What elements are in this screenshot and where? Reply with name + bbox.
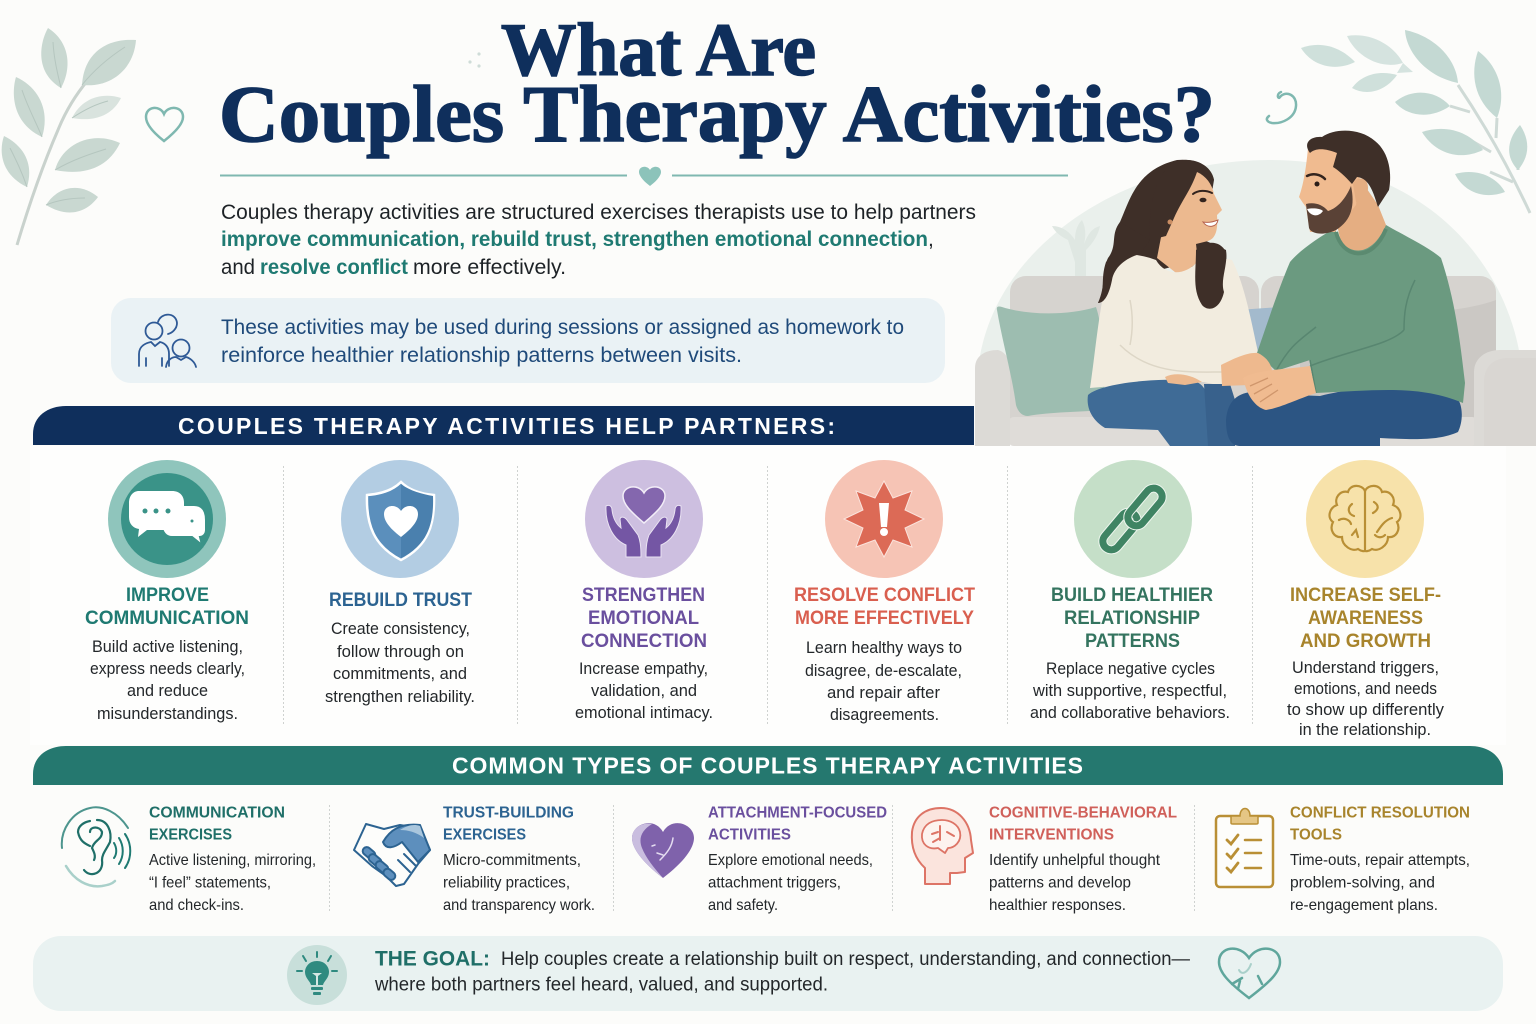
description: with supportive, respectful, [1032, 682, 1227, 700]
heading: RESOLVE CONFLICT [794, 585, 975, 606]
spiral decoration [1267, 92, 1296, 123]
heading: REBUILD TRUST [329, 590, 472, 611]
description: to show up differently [1287, 701, 1445, 719]
activity: cognitive-behavioral interventions [912, 804, 1177, 914]
blue pillow [1210, 307, 1280, 365]
heading [1290, 585, 1441, 652]
heading: COGNITIVE-BEHAVIORAL [989, 804, 1177, 822]
heading [989, 804, 1177, 844]
benefit: resolve conflict [794, 460, 975, 724]
heading: ACTIVITIES [708, 826, 791, 844]
description: re-engagement plans. [1290, 897, 1438, 914]
activity dividers [330, 805, 1194, 912]
description: Replace negative cycles [1046, 660, 1215, 678]
illustration: couple on sofa [975, 131, 1536, 446]
goal bar [33, 936, 1503, 1011]
activity: communication exercises [62, 804, 316, 914]
title [219, 9, 1215, 159]
description: Increase empathy, [579, 660, 708, 678]
description: and reduce [127, 682, 208, 700]
description: and safety. [708, 897, 778, 914]
woman hand on knee [1165, 374, 1202, 385]
heading: EMOTIONAL [588, 608, 699, 629]
icon: starburst alert [825, 460, 943, 578]
description: Understand triggers, [1292, 659, 1439, 677]
left leaf branch decoration [2, 28, 136, 245]
icon: ear [62, 807, 130, 886]
goal text: THE GOAL: [375, 948, 490, 970]
arch backdrop [978, 160, 1522, 400]
description: healthier responses. [989, 897, 1126, 914]
description: emotional intimacy. [575, 704, 713, 722]
icon: clipboard checklist [1216, 808, 1273, 887]
icon: chat bubbles [108, 460, 226, 578]
right leaf branch decoration [1301, 30, 1530, 213]
green pillow [997, 306, 1104, 416]
man face [1299, 148, 1360, 232]
goal text: where both partners feel heard, valued, and supported. [374, 974, 828, 996]
intro paragraph: more effectively. [413, 256, 566, 279]
icon: head with brain [912, 808, 973, 884]
description [989, 852, 1161, 914]
activity: conflict resolution tools [1216, 804, 1470, 914]
intro paragraph [221, 201, 976, 279]
icon: purple heart [632, 823, 694, 878]
heading: EXERCISES [149, 826, 232, 844]
benefit: improve communication [85, 460, 249, 723]
woman hair back [1098, 160, 1226, 308]
icon: couple [139, 315, 196, 367]
description: and transparency work. [443, 897, 595, 914]
callout: homework note: reinforce healthier relationship patterns between visits. [221, 344, 742, 367]
benefit: strengthen emotional connection [575, 460, 713, 722]
heading: IMPROVE [126, 585, 209, 606]
icon: handshake [354, 824, 430, 886]
heading: BUILD HEALTHIER [1051, 585, 1213, 606]
sofa [975, 276, 1536, 446]
description: commitments, and [333, 665, 467, 683]
heading: TOOLS [1290, 826, 1342, 844]
description: problem-solving, and [1290, 874, 1435, 892]
icon: brain [1306, 460, 1424, 578]
woman hair strand left [1098, 222, 1150, 303]
woman hair front [1150, 160, 1214, 240]
description [1290, 852, 1470, 914]
description: strengthen reliability. [325, 688, 475, 706]
description: Explore emotional needs, [708, 852, 873, 869]
heading: AND GROWTH [1300, 631, 1431, 652]
description: “I feel” statements, [149, 874, 271, 892]
man sweater [1257, 225, 1465, 403]
benefit: self-awareness [1287, 460, 1445, 739]
man neck [1335, 176, 1386, 262]
description: Time-outs, repair attempts, [1290, 852, 1470, 869]
description: Learn healthy ways to [806, 639, 962, 657]
heading [149, 804, 285, 844]
heading [1290, 804, 1470, 844]
sparkle dots [468, 52, 481, 68]
man jeans [1226, 385, 1462, 446]
description: express needs clearly, [90, 660, 245, 678]
heading: INCREASE SELF- [1290, 585, 1441, 606]
woman features [1168, 191, 1218, 226]
heading: RELATIONSHIP [1064, 608, 1200, 629]
description: disagree, de-escalate, [805, 662, 962, 680]
background plant [1052, 220, 1100, 282]
description: attachment triggers, [708, 874, 841, 892]
intro paragraph: improve communication, rebuild trust, strengthen emotional connection [221, 228, 928, 251]
woman jeans [1088, 380, 1210, 446]
description: Micro-commitments, [443, 852, 581, 869]
man eye and brow [1307, 174, 1325, 179]
activity: attachment-focused activities [632, 804, 887, 914]
man hair [1307, 131, 1390, 207]
description [90, 638, 245, 723]
heading: AWARENESS [1308, 608, 1423, 629]
description: and check-ins. [149, 897, 244, 914]
description: disagreements. [830, 706, 939, 724]
heading [581, 585, 707, 652]
panel: benefits background [30, 446, 1506, 745]
heading: CONNECTION [581, 631, 707, 652]
benefit: healthier patterns [1030, 460, 1230, 722]
heading: EXERCISES [443, 826, 526, 844]
description: and collaborative behaviors. [1030, 704, 1230, 722]
woman hair strand over sweater [1195, 243, 1226, 309]
description: Active listening, mirroring, [149, 852, 316, 869]
heading: PATTERNS [1085, 631, 1180, 652]
woman sweater [1090, 254, 1258, 388]
description [575, 660, 713, 722]
description: Create consistency, [331, 620, 470, 638]
description: misunderstandings. [97, 705, 238, 723]
heart outline decoration [146, 108, 183, 141]
man beard [1306, 186, 1353, 234]
description [443, 852, 595, 914]
heading: INTERVENTIONS [989, 826, 1114, 844]
description: emotions, and needs [1294, 680, 1437, 698]
description: patterns and develop [989, 874, 1131, 892]
activity: trust-building exercises [354, 804, 595, 914]
description [149, 852, 316, 914]
callout: homework note [111, 298, 945, 383]
heading [443, 804, 574, 844]
heading: COMMUNICATION [149, 804, 285, 822]
heading: MORE EFFECTIVELY [795, 608, 974, 629]
description: Build active listening, [92, 638, 243, 656]
heading: COMMUNICATION [85, 608, 249, 629]
title divider with heart [220, 167, 1068, 186]
intro paragraph: Couples therapy activities are structured exercises therapists use to help partners [221, 201, 976, 224]
banner: common types [33, 746, 1503, 785]
icon: chain link [1074, 460, 1192, 578]
description [708, 852, 873, 914]
banner: help partners: COUPLES THERAPY ACTIVITIES HELP PARTNERS: [178, 413, 835, 439]
intro paragraph: resolve conflict [260, 256, 408, 279]
description [325, 620, 475, 706]
heading: CONFLICT RESOLUTION [1290, 804, 1470, 822]
joined hands [1221, 353, 1316, 410]
description: validation, and [591, 682, 697, 700]
banner: common types: COMMON TYPES OF COUPLES THERAPY ACTIVITIES [452, 752, 1083, 778]
description: and repair after [827, 684, 941, 702]
heading [1051, 585, 1213, 652]
description: follow through on [337, 643, 464, 661]
intro paragraph: , [928, 228, 934, 251]
title: Couples Therapy Activities? [219, 71, 1215, 159]
heading [794, 585, 975, 629]
heading: TRUST-BUILDING [443, 804, 574, 822]
banner: help partners [33, 406, 974, 445]
man ear [1353, 178, 1368, 202]
heading: ATTACHMENT-FOCUSED [708, 804, 887, 822]
panel dividers [284, 466, 1252, 724]
goal text: Help couples create a relationship built on respect, understanding, and connection— [501, 949, 1190, 970]
description [805, 639, 962, 724]
callout: homework note: These activities may be used during sessions or assigned as homework to [221, 316, 904, 339]
description: reliability practices, [443, 874, 570, 892]
heading: STRENGTHEN [582, 585, 705, 606]
title: What Are [501, 9, 816, 92]
description [1287, 659, 1445, 739]
heading [85, 585, 249, 629]
description [1030, 660, 1230, 722]
woman neck and face [1157, 172, 1222, 276]
icon: shield [341, 460, 459, 578]
intro paragraph: and [221, 256, 255, 279]
description: Identify unhelpful thought [989, 852, 1161, 869]
icon: lightbulb [287, 945, 347, 1005]
description: in the relationship. [1299, 721, 1431, 739]
goal text [374, 948, 1190, 996]
icon: hands holding heart [585, 460, 703, 578]
benefit: rebuild trust [325, 460, 475, 706]
heading [708, 804, 887, 844]
icon: mended heart [1219, 949, 1280, 998]
